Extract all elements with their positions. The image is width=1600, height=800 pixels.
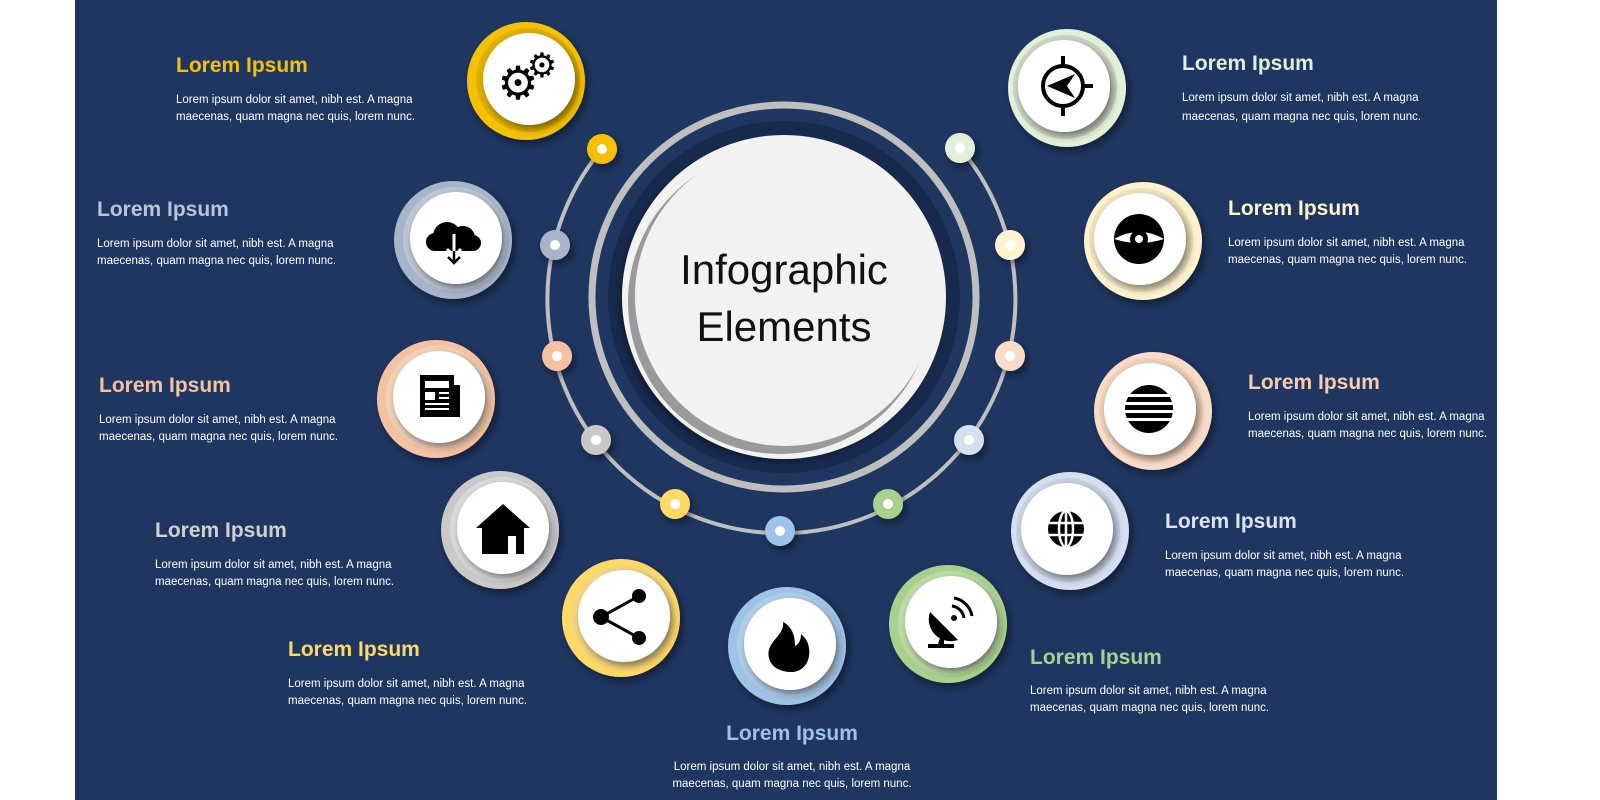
icon: compass	[1008, 29, 1126, 147]
text: newspaper	[99, 374, 338, 443]
text: flame	[672, 722, 912, 790]
text: lines: Lorem ipsum dolor sit amet, nibh est. A magna	[1248, 411, 1485, 423]
text: globe: Lorem Ipsum	[1165, 510, 1297, 533]
text: satellite: Lorem ipsum dolor sit amet, nibh est. A magna	[1030, 685, 1267, 697]
text: newspaper: Lorem ipsum dolor sit amet, nibh est. A magna	[99, 414, 336, 426]
text: cloud: Lorem ipsum dolor sit amet, nibh est. A magna	[97, 238, 334, 250]
text: home: maecenas, quam magna nec quis, lorem nunc.	[155, 576, 394, 588]
text: newspaper: Lorem Ipsum	[99, 374, 231, 397]
title: Elements	[696, 303, 872, 350]
text: lines: maecenas, quam magna nec quis, lorem nunc.	[1248, 428, 1487, 440]
text: home	[155, 519, 394, 588]
text: pokeball: maecenas, quam magna nec quis, lorem nunc.	[1228, 254, 1467, 266]
text: globe: maecenas, quam magna nec quis, lorem nunc.	[1165, 567, 1404, 579]
text: lines	[1248, 371, 1487, 440]
text: home: Lorem ipsum dolor sit amet, nibh est. A magna	[155, 559, 392, 571]
text: share: Lorem ipsum dolor sit amet, nibh est. A magna	[288, 678, 525, 690]
text: satellite: Lorem Ipsum	[1030, 646, 1162, 669]
title: Infographic	[680, 246, 888, 293]
icon: home	[441, 471, 559, 589]
text: lines: Lorem Ipsum	[1248, 371, 1380, 394]
text: flame: maecenas, quam magna nec quis, lorem nunc.	[672, 778, 912, 790]
icon: flame	[728, 587, 846, 705]
text: flame: Lorem Ipsum	[726, 722, 858, 745]
text: gears: maecenas, quam magna nec quis, lorem nunc.	[176, 111, 415, 123]
outer thin ring arc	[547, 148, 1015, 533]
text: share: Lorem Ipsum	[288, 638, 420, 661]
text: cloud: maecenas, quam magna nec quis, lorem nunc.	[97, 255, 336, 267]
text: globe: Lorem ipsum dolor sit amet, nibh est. A magna	[1165, 550, 1402, 562]
text: compass	[1182, 52, 1421, 123]
dots on ring	[540, 133, 1025, 546]
text: cloud: Lorem Ipsum	[97, 198, 229, 221]
text: gears: Lorem ipsum dolor sit amet, nibh est. A magna	[176, 94, 413, 106]
icon: satellite	[889, 565, 1007, 683]
text: compass: Lorem Ipsum	[1182, 52, 1314, 75]
icon: gears: ⚙	[527, 46, 557, 86]
text: home: Lorem Ipsum	[155, 519, 287, 542]
icon: gears: ⚙	[497, 56, 539, 110]
icon: lines circle	[1094, 352, 1212, 470]
text: pokeball	[1228, 197, 1467, 266]
text: gears: Lorem Ipsum	[176, 54, 308, 77]
central ring and disk	[592, 105, 976, 489]
text: gears	[176, 54, 415, 123]
text: pokeball: Lorem Ipsum	[1228, 197, 1360, 220]
text: share: maecenas, quam magna nec quis, lorem nunc.	[288, 695, 527, 707]
text: satellite	[1030, 646, 1269, 714]
icon: cloud download	[394, 181, 512, 299]
text: flame: Lorem ipsum dolor sit amet, nibh est. A magna	[674, 761, 911, 773]
title	[680, 246, 888, 350]
icon: globe	[1011, 472, 1129, 590]
text: newspaper: maecenas, quam magna nec quis, lorem nunc.	[99, 431, 338, 443]
text: satellite: maecenas, quam magna nec quis, lorem nunc.	[1030, 702, 1269, 714]
text: cloud	[97, 198, 336, 267]
icon: share	[562, 559, 680, 677]
icon: pokeball	[1084, 182, 1202, 300]
text: compass: maecenas, quam magna nec quis, lorem nunc.	[1182, 111, 1421, 123]
text: pokeball: Lorem ipsum dolor sit amet, nibh est. A magna	[1228, 237, 1465, 249]
text: compass: Lorem ipsum dolor sit amet, nibh est. A magna	[1182, 92, 1419, 104]
icon: newspaper	[377, 340, 495, 458]
text: globe	[1165, 510, 1404, 579]
icon: gears	[467, 22, 585, 140]
text: share	[288, 638, 527, 707]
